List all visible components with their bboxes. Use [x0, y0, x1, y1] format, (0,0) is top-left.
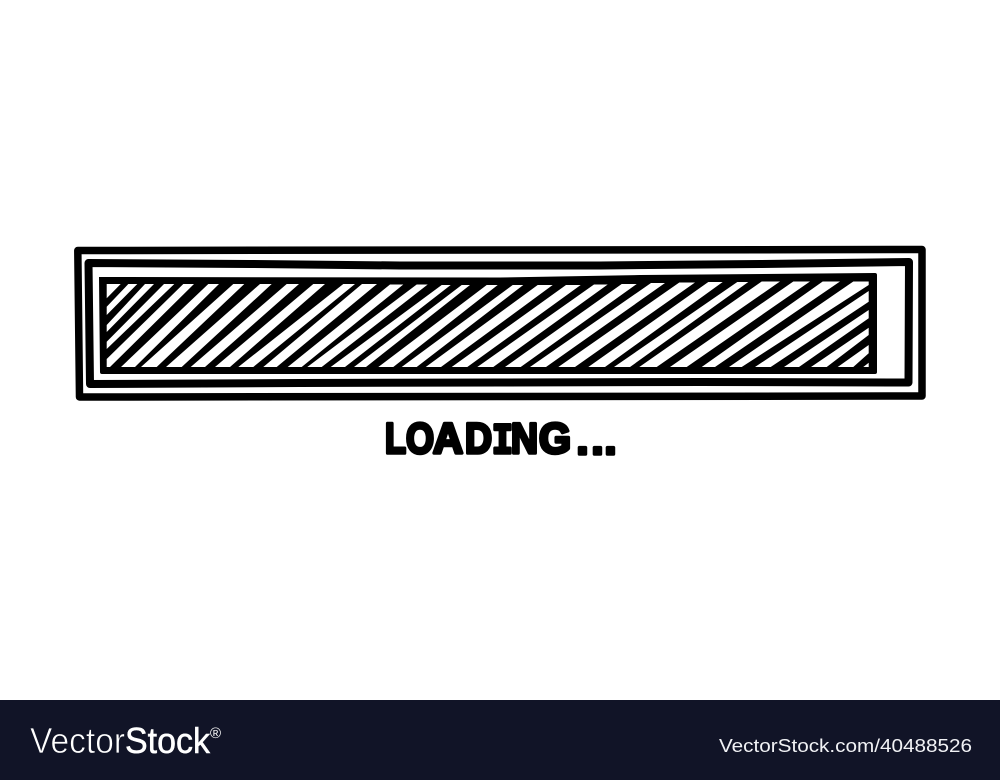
- logo: VectorStock: Vector: [30, 720, 125, 761]
- loading label: I: [492, 417, 513, 466]
- logo: VectorStock: [30, 720, 221, 761]
- loading label: [385, 415, 616, 466]
- loading label: D: [465, 415, 492, 463]
- outer frame: [78, 250, 922, 397]
- loading label: ...: [576, 416, 616, 464]
- loading label: L: [385, 415, 406, 463]
- logo: VectorStock: Stock: [125, 720, 211, 761]
- image id url: VectorStock.com/40488526: [719, 736, 972, 756]
- loading label: G: [539, 415, 571, 463]
- loading label: O: [406, 415, 434, 463]
- footer band: [0, 700, 1000, 780]
- progress fill background: [99, 273, 877, 374]
- logo: VectorStock: ®: [210, 725, 221, 742]
- loading label: A: [433, 415, 463, 463]
- hatch stripes: [107, 282, 869, 367]
- loading label: N: [511, 415, 538, 463]
- progress fill with diagonal hatching: [99, 273, 877, 374]
- inner frame: [88, 262, 909, 384]
- loading bar: [78, 250, 922, 397]
